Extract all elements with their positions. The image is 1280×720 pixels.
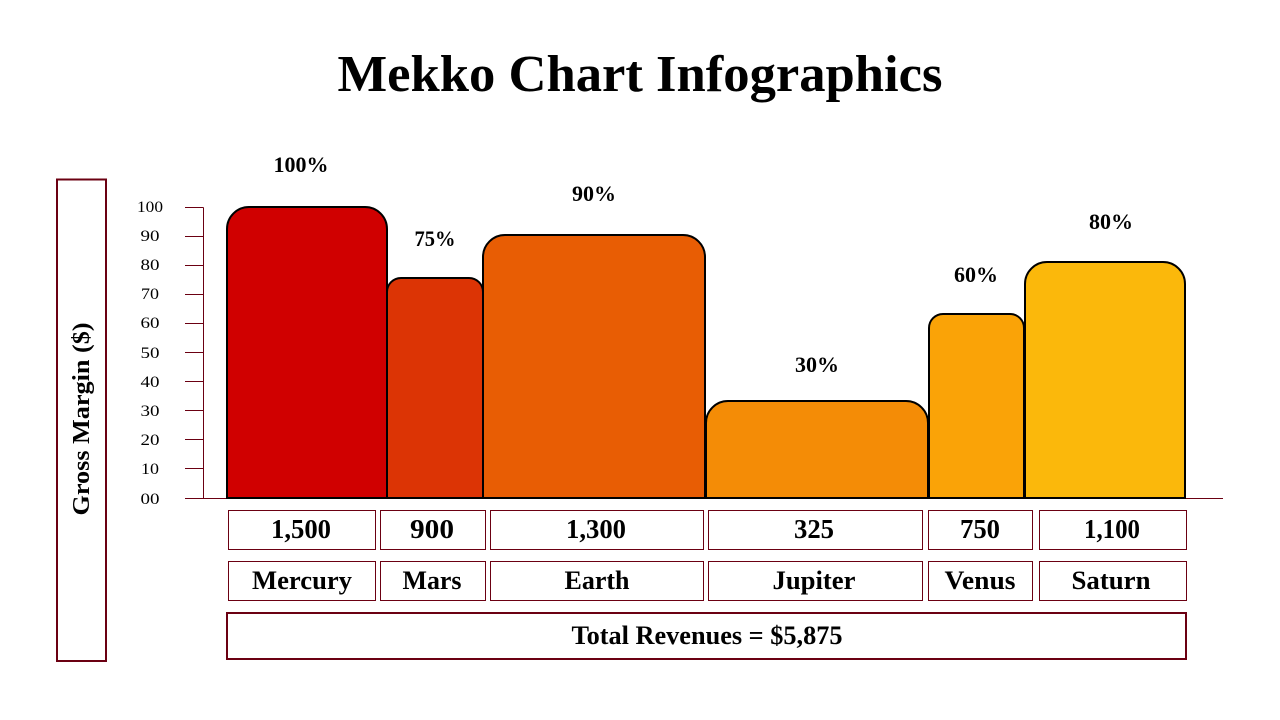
y axis bbox=[137, 199, 1223, 508]
total revenues box bbox=[227, 613, 1186, 659]
y axis: 80 bbox=[140, 257, 160, 274]
value boxes: 325 bbox=[794, 514, 834, 544]
y axis: 50 bbox=[140, 345, 160, 362]
percentage labels: 60% bbox=[954, 262, 998, 287]
percentage labels: 90% bbox=[572, 181, 616, 206]
y axis: 60 bbox=[140, 315, 160, 332]
y-axis title box: Gross Margin ($) bbox=[69, 323, 95, 515]
y axis: 40 bbox=[140, 374, 160, 391]
bar: Earth bbox=[483, 235, 705, 498]
percentage labels bbox=[274, 152, 1133, 377]
bar: Saturn bbox=[1025, 262, 1185, 498]
bar: Mercury bbox=[227, 207, 387, 498]
total revenues box: Total Revenues = $5,875 bbox=[572, 621, 842, 650]
percentage labels: 100% bbox=[274, 152, 328, 177]
y axis: 10 bbox=[141, 461, 159, 478]
bar: Mars bbox=[387, 278, 483, 498]
planet name boxes: Mars bbox=[402, 566, 462, 595]
percentage labels: 80% bbox=[1089, 209, 1133, 234]
y axis: 30 bbox=[140, 403, 160, 420]
planet name boxes: Earth bbox=[564, 566, 630, 595]
planet name boxes: Saturn bbox=[1072, 566, 1151, 595]
y axis: 00 bbox=[140, 491, 160, 508]
percentage labels: 30% bbox=[795, 352, 839, 377]
y axis: 90 bbox=[140, 228, 160, 245]
value boxes: 1,500 bbox=[271, 514, 331, 544]
title: Mekko Chart Infographics bbox=[338, 46, 942, 103]
value boxes: 1,300 bbox=[566, 514, 626, 544]
value boxes: 1,100 bbox=[1084, 514, 1140, 544]
value boxes bbox=[228, 510, 1186, 550]
bar: Venus bbox=[929, 314, 1024, 498]
planet name boxes: Jupiter bbox=[772, 566, 856, 595]
y axis: 20 bbox=[140, 432, 160, 449]
value boxes: 750 bbox=[960, 514, 1000, 544]
y axis: 70 bbox=[141, 286, 159, 303]
planet name boxes: Mercury bbox=[252, 566, 352, 595]
bar: Jupiter bbox=[706, 401, 928, 498]
percentage labels: 75% bbox=[414, 226, 456, 251]
mekko bars bbox=[227, 207, 1185, 498]
y axis: 100 bbox=[137, 199, 163, 216]
value boxes: 900 bbox=[410, 514, 454, 544]
planet name boxes: Venus bbox=[944, 566, 1016, 595]
planet name boxes bbox=[228, 562, 1186, 600]
y-axis title box bbox=[57, 180, 106, 661]
